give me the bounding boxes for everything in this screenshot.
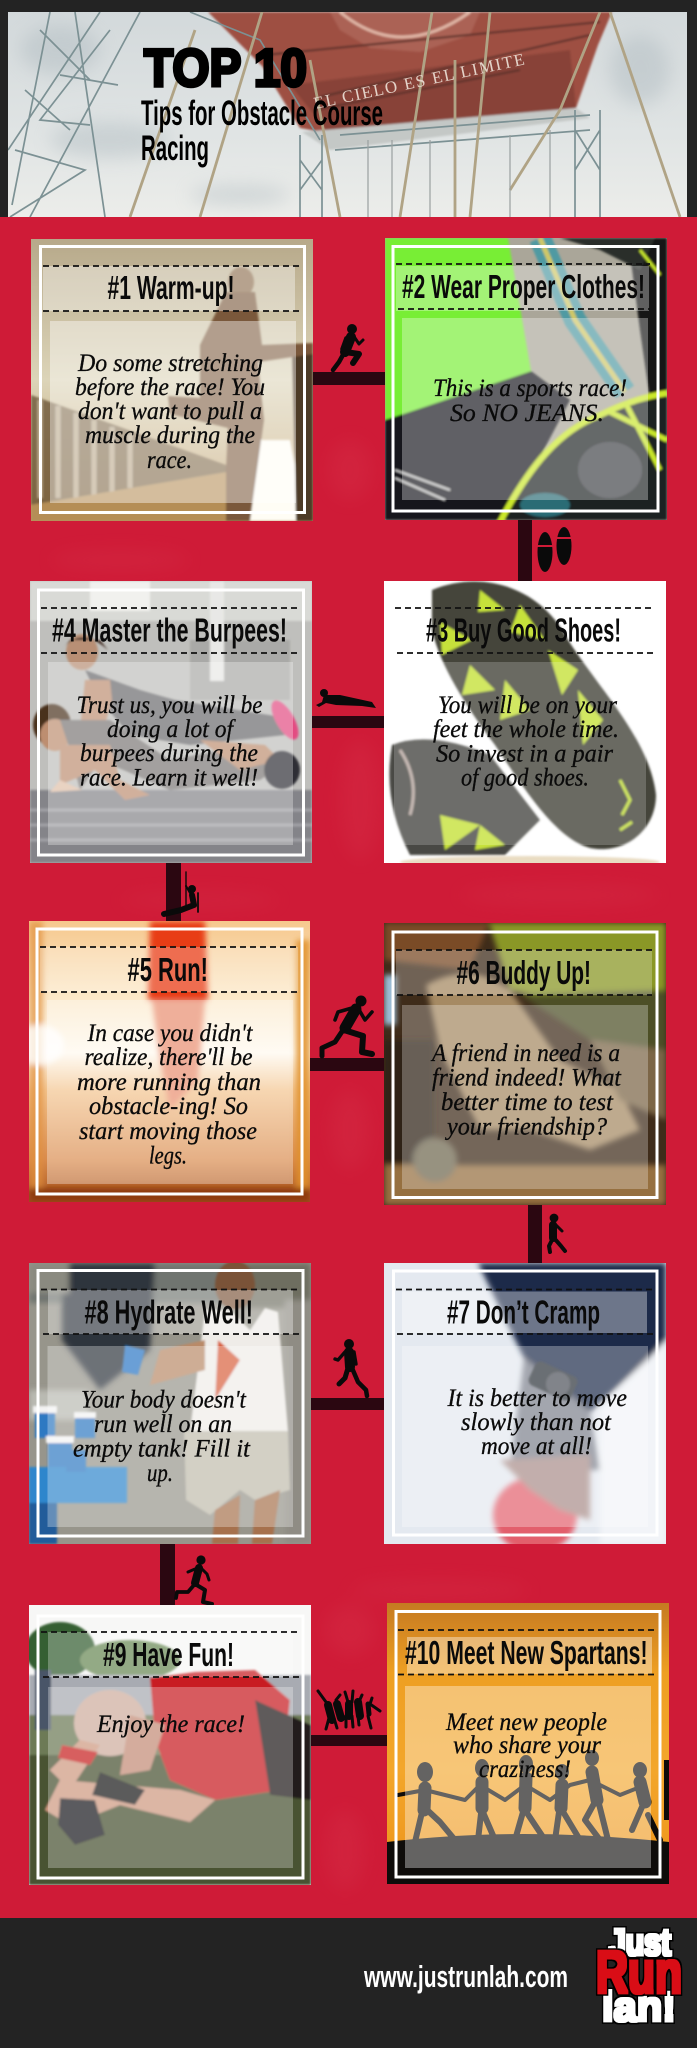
card 1: warm-up: [31, 239, 313, 521]
body text: feet the whole time.: [433, 716, 619, 743]
white frame: [396, 1612, 660, 1877]
card 2: clothes: [385, 238, 667, 522]
body text: don't want to pull a: [78, 398, 262, 425]
body text: muscle during the: [85, 422, 255, 449]
body text: friend indeed! What: [432, 1064, 622, 1092]
body text: It is better to move: [447, 1385, 627, 1412]
heading: #1 Warm-up!: [108, 269, 234, 306]
body band: [394, 662, 646, 845]
title band: [48, 1290, 293, 1334]
title band: [396, 950, 652, 995]
body text: run well on an: [94, 1411, 232, 1438]
body text: before the race! You: [75, 374, 265, 401]
white frame: [394, 1271, 657, 1535]
body text: race. Learn it well!: [80, 764, 258, 792]
photo: silhouettes holding hands at sunset: [387, 1603, 669, 1884]
body text: So NO JEANS.: [450, 400, 604, 427]
body text: Do some stretching: [77, 350, 263, 377]
body text: [447, 1385, 627, 1460]
card 9: have fun: [25, 1605, 311, 1885]
body text: legs.: [149, 1142, 187, 1170]
title: TOP 10: [144, 39, 307, 98]
card 10: meet new spartans: [387, 1603, 669, 1884]
dashed rules: [398, 1630, 656, 1674]
footer band: [0, 1918, 697, 2048]
icon: push-up figure: [316, 689, 376, 708]
body text: [430, 1040, 622, 1140]
logo: Just Run lah!: [596, 1922, 682, 2030]
photo: hand holding sore knee: [384, 1263, 666, 1553]
white frame: [38, 1616, 303, 1878]
photo: muddy hands helping: [384, 923, 666, 1205]
header photo: obstacle rig: [8, 12, 687, 217]
logo: Just Run lah!: Just: [609, 1922, 671, 1964]
heading: #7 Don’t Cramp: [447, 1294, 600, 1330]
body text: Enjoy the race!: [96, 1711, 245, 1738]
body text: [433, 692, 619, 792]
body text: race.: [147, 447, 192, 474]
body text: Your body doesn't: [81, 1386, 247, 1414]
body text: who share your: [453, 1732, 601, 1759]
body text: craziness!: [479, 1756, 571, 1783]
body text: [76, 692, 262, 792]
body text: doing a lot of: [107, 716, 236, 743]
title band: [396, 266, 649, 311]
connectors between cards: [160, 372, 542, 1746]
body text: more running than: [77, 1069, 261, 1096]
title band: [402, 1292, 647, 1333]
body text: This is a sports race!: [433, 375, 627, 402]
dashed rules: [40, 947, 298, 992]
card 3: shoes: [384, 581, 666, 868]
body text: your friendship?: [444, 1114, 607, 1140]
heading: #5 Run!: [128, 951, 208, 988]
white frame: [40, 246, 304, 512]
photo: man crawling on grass: [25, 1605, 311, 1885]
body text: move at all!: [481, 1433, 592, 1460]
title band: [407, 1637, 652, 1674]
heading: #9 Have Fun!: [103, 1636, 234, 1673]
body band: [405, 1686, 651, 1868]
body text: [73, 1386, 251, 1487]
icon: runner 4: [335, 1339, 367, 1396]
body text: burpees during the: [80, 740, 258, 767]
body band: [402, 318, 648, 500]
icon: runner 1: [333, 324, 363, 370]
subtitle line 2: Racing: [141, 129, 209, 168]
logo: Just Run lah!: lah!: [602, 1983, 676, 2030]
icon: sprinter: [322, 996, 372, 1056]
photo: woman stretching on bridge: [31, 239, 313, 521]
icon: footprints: [537, 527, 572, 572]
body text: [433, 375, 627, 427]
body text: So invest in a pair: [436, 740, 613, 768]
body text: slowly than not: [461, 1409, 612, 1436]
title band: [40, 947, 298, 992]
icon: runner 3: [549, 1214, 565, 1252]
icon: runner 5: [176, 1555, 212, 1604]
photo: runner at sunset: [16, 921, 310, 1202]
dashed rules: [396, 264, 650, 309]
card 7: cramp: [384, 1263, 666, 1553]
dashed rules: [41, 1632, 300, 1677]
heading: #6 Buddy Up!: [456, 954, 591, 991]
body text: [75, 350, 265, 474]
white frame: [393, 932, 657, 1198]
dashed rules: [41, 1290, 300, 1334]
header dark frame: [0, 0, 697, 217]
body text: In case you didn't: [87, 1020, 253, 1047]
body band: [48, 1346, 293, 1527]
body text: start moving those: [79, 1118, 257, 1145]
body text: Meet new people: [445, 1709, 607, 1736]
card 4: burpees: [30, 581, 312, 863]
body text: [445, 1709, 607, 1783]
dashed rules: [396, 950, 652, 995]
dashed rules: [396, 1290, 654, 1334]
dashed rules: [395, 608, 654, 653]
body text: [77, 1020, 261, 1170]
photo: child runner at water station: [29, 1261, 311, 1544]
heading: #8 Hydrate Well!: [84, 1294, 253, 1330]
billboard slogan: EL CIELO ES EL LIMITE: [312, 50, 526, 113]
photo: couple doing push-ups in gym: [30, 581, 312, 863]
photo: shoe soles on white: [384, 581, 666, 868]
white frame: [38, 590, 304, 855]
body band: [48, 662, 293, 845]
dashed rules: [43, 266, 301, 311]
body text: obstacle-ing! So: [89, 1093, 248, 1120]
icon: rope climber: [164, 872, 198, 914]
body text: up.: [147, 1460, 173, 1487]
body text: better time to test: [441, 1089, 614, 1116]
white frame: [38, 1270, 303, 1536]
body band: [50, 321, 296, 503]
body text: A friend in need is a: [430, 1040, 620, 1067]
title band: [48, 1632, 293, 1677]
body text: realize, there'll be: [84, 1044, 252, 1071]
title band: [43, 266, 295, 311]
heading: #4 Master the Burpees!: [52, 612, 287, 648]
header band: [0, 0, 697, 217]
card 5: run: [16, 921, 310, 1202]
body band: [402, 1346, 648, 1527]
subtitle line 1: Tips for Obstacle Course: [141, 94, 383, 133]
body band: [48, 1687, 293, 1868]
body band: [47, 1000, 293, 1184]
card 8: hydrate: [29, 1261, 311, 1544]
website url: www.justrunlah.com: [363, 1959, 568, 1994]
white frame: [37, 929, 302, 1194]
dashed rules: [41, 608, 298, 653]
body band: [402, 1005, 648, 1189]
body text: empty tank! Fill it: [73, 1436, 251, 1462]
body text: Trust us, you will be: [76, 692, 262, 719]
card 6: buddy up: [384, 923, 666, 1205]
icon: jumping group: [318, 1691, 380, 1729]
white frame: [393, 246, 658, 511]
body text: You will be on your: [438, 692, 617, 719]
body text: of good shoes.: [461, 764, 589, 792]
photo: green shirt, pants and shoes: [385, 238, 667, 522]
